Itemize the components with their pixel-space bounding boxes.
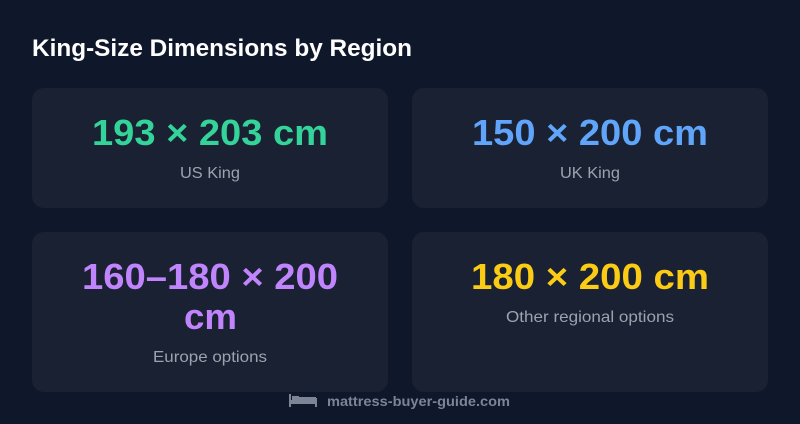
US King dimensions: 193 × 203 cm [92,112,328,153]
panel: UK King [412,88,768,208]
Europe dimensions: cm [184,296,237,337]
US King label: US King [180,165,240,182]
panel: Europe options [32,232,388,392]
panel: US King [32,88,388,208]
Other regional dimensions: 180 × 200 cm [471,256,709,297]
footer: watermark [289,393,510,409]
panel: Other regional options [412,232,768,392]
Europe dimensions [82,256,338,337]
Other regional label: Other regional options [506,309,674,326]
icon: bed [289,394,317,407]
Europe dimensions: 160–180 × 200 [82,256,338,297]
title: King-Size Dimensions by Region [32,35,412,62]
UK King label: UK King [560,165,620,182]
Europe label: Europe options [153,349,267,366]
UK King dimensions: 150 × 200 cm [472,112,708,153]
site name: mattress-buyer-guide.com [327,393,510,409]
